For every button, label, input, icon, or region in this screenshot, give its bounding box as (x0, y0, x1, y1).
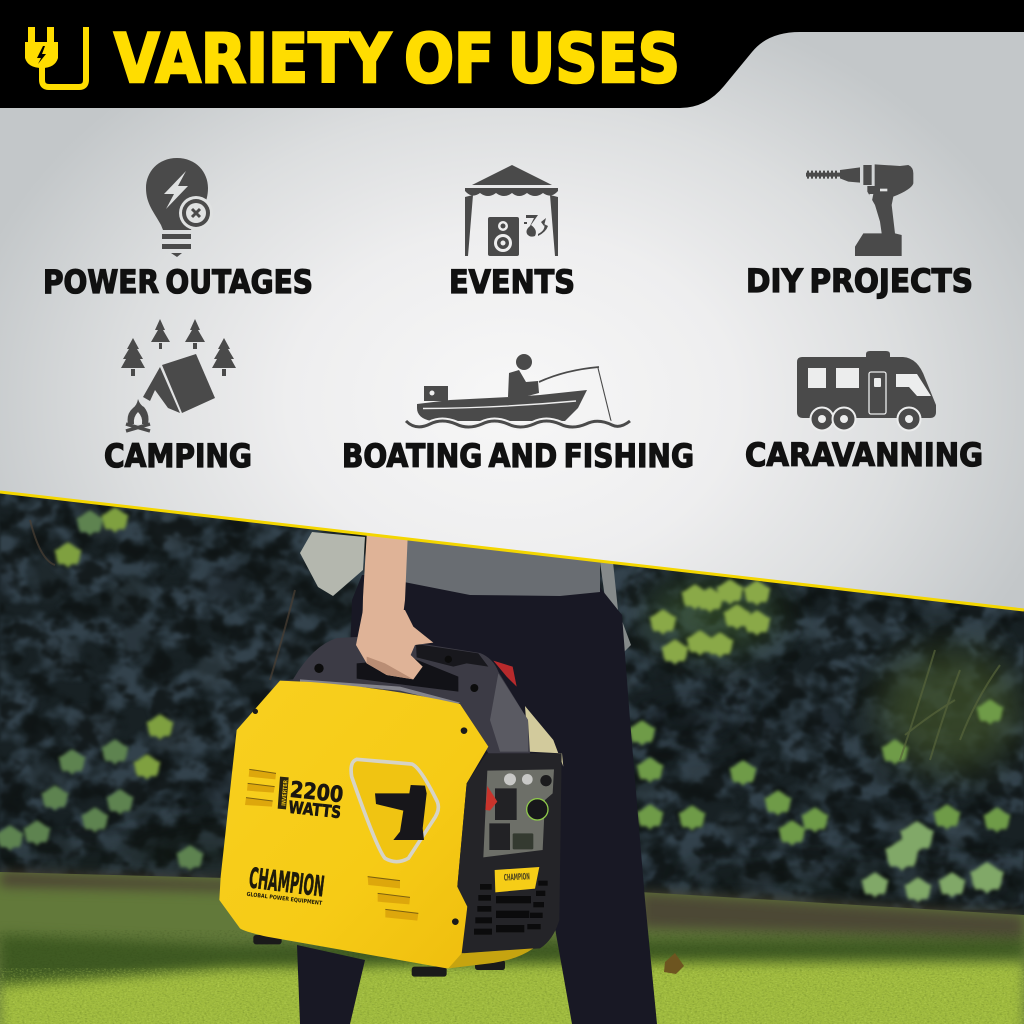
black control panel (457, 753, 562, 953)
grey content panel (0, 0, 1024, 610)
gripping hand (356, 610, 433, 679)
inverter tag (278, 777, 289, 809)
handle and grey top shell (280, 637, 530, 753)
wattage badge: 2200 (289, 778, 344, 808)
vents (474, 881, 548, 935)
inner carry handle (375, 785, 427, 840)
generator (219, 610, 563, 977)
yellow body (219, 681, 488, 968)
ivy leaves catching light (0, 507, 1011, 903)
label: CAMPING (104, 437, 252, 475)
cloth at hip (300, 532, 365, 596)
label: DIY PROJECTS (746, 262, 973, 300)
strap on right side (600, 562, 631, 658)
icon: canopy tent with speaker (465, 165, 558, 256)
label: POWER OUTAGES (43, 263, 313, 301)
item: events (449, 165, 575, 301)
wattage badge (288, 778, 344, 822)
item: power outages (43, 158, 313, 301)
icon: plug with cable (25, 27, 86, 87)
dry grass stems (30, 520, 1000, 760)
label: EVENTS (449, 263, 575, 301)
label: BOATING AND FISHING (342, 437, 694, 475)
red cap (493, 661, 517, 687)
feet (253, 935, 505, 977)
wattage badge: WATTS (288, 798, 342, 822)
generator: CHAMPION (247, 861, 326, 903)
Champion logo (246, 861, 326, 907)
header banner (0, 0, 1024, 108)
lawn (0, 872, 1024, 1024)
icon: power drill (806, 164, 913, 256)
icon: fisherman in boat (406, 354, 630, 427)
generator: INVERTER (281, 779, 290, 806)
yellow data label (495, 867, 539, 892)
trousers (345, 575, 657, 1024)
item: DIY projects (746, 164, 973, 300)
body vents (245, 769, 418, 921)
item: camping (104, 319, 252, 475)
body screws (461, 727, 467, 734)
Champion logo: GLOBAL POWER EQUIPMENT (246, 892, 322, 907)
shirt (402, 530, 600, 596)
photo: person carrying generator (297, 530, 657, 1024)
label: CARAVANNING (745, 436, 983, 474)
outlet faceplate (483, 769, 554, 857)
chrome handle window (351, 759, 438, 862)
pale side sliver (525, 706, 563, 767)
arm (362, 530, 408, 640)
icon: motorhome (797, 351, 936, 430)
item: boating and fishing (342, 354, 694, 475)
fallen leaf (664, 953, 684, 974)
icon: light bulb with x (146, 158, 213, 257)
icon: tent, trees and campfire (121, 319, 236, 431)
title: VARIETY OF USES (114, 20, 680, 99)
item: caravanning (745, 351, 983, 474)
generator: CHAMPION (504, 872, 530, 884)
